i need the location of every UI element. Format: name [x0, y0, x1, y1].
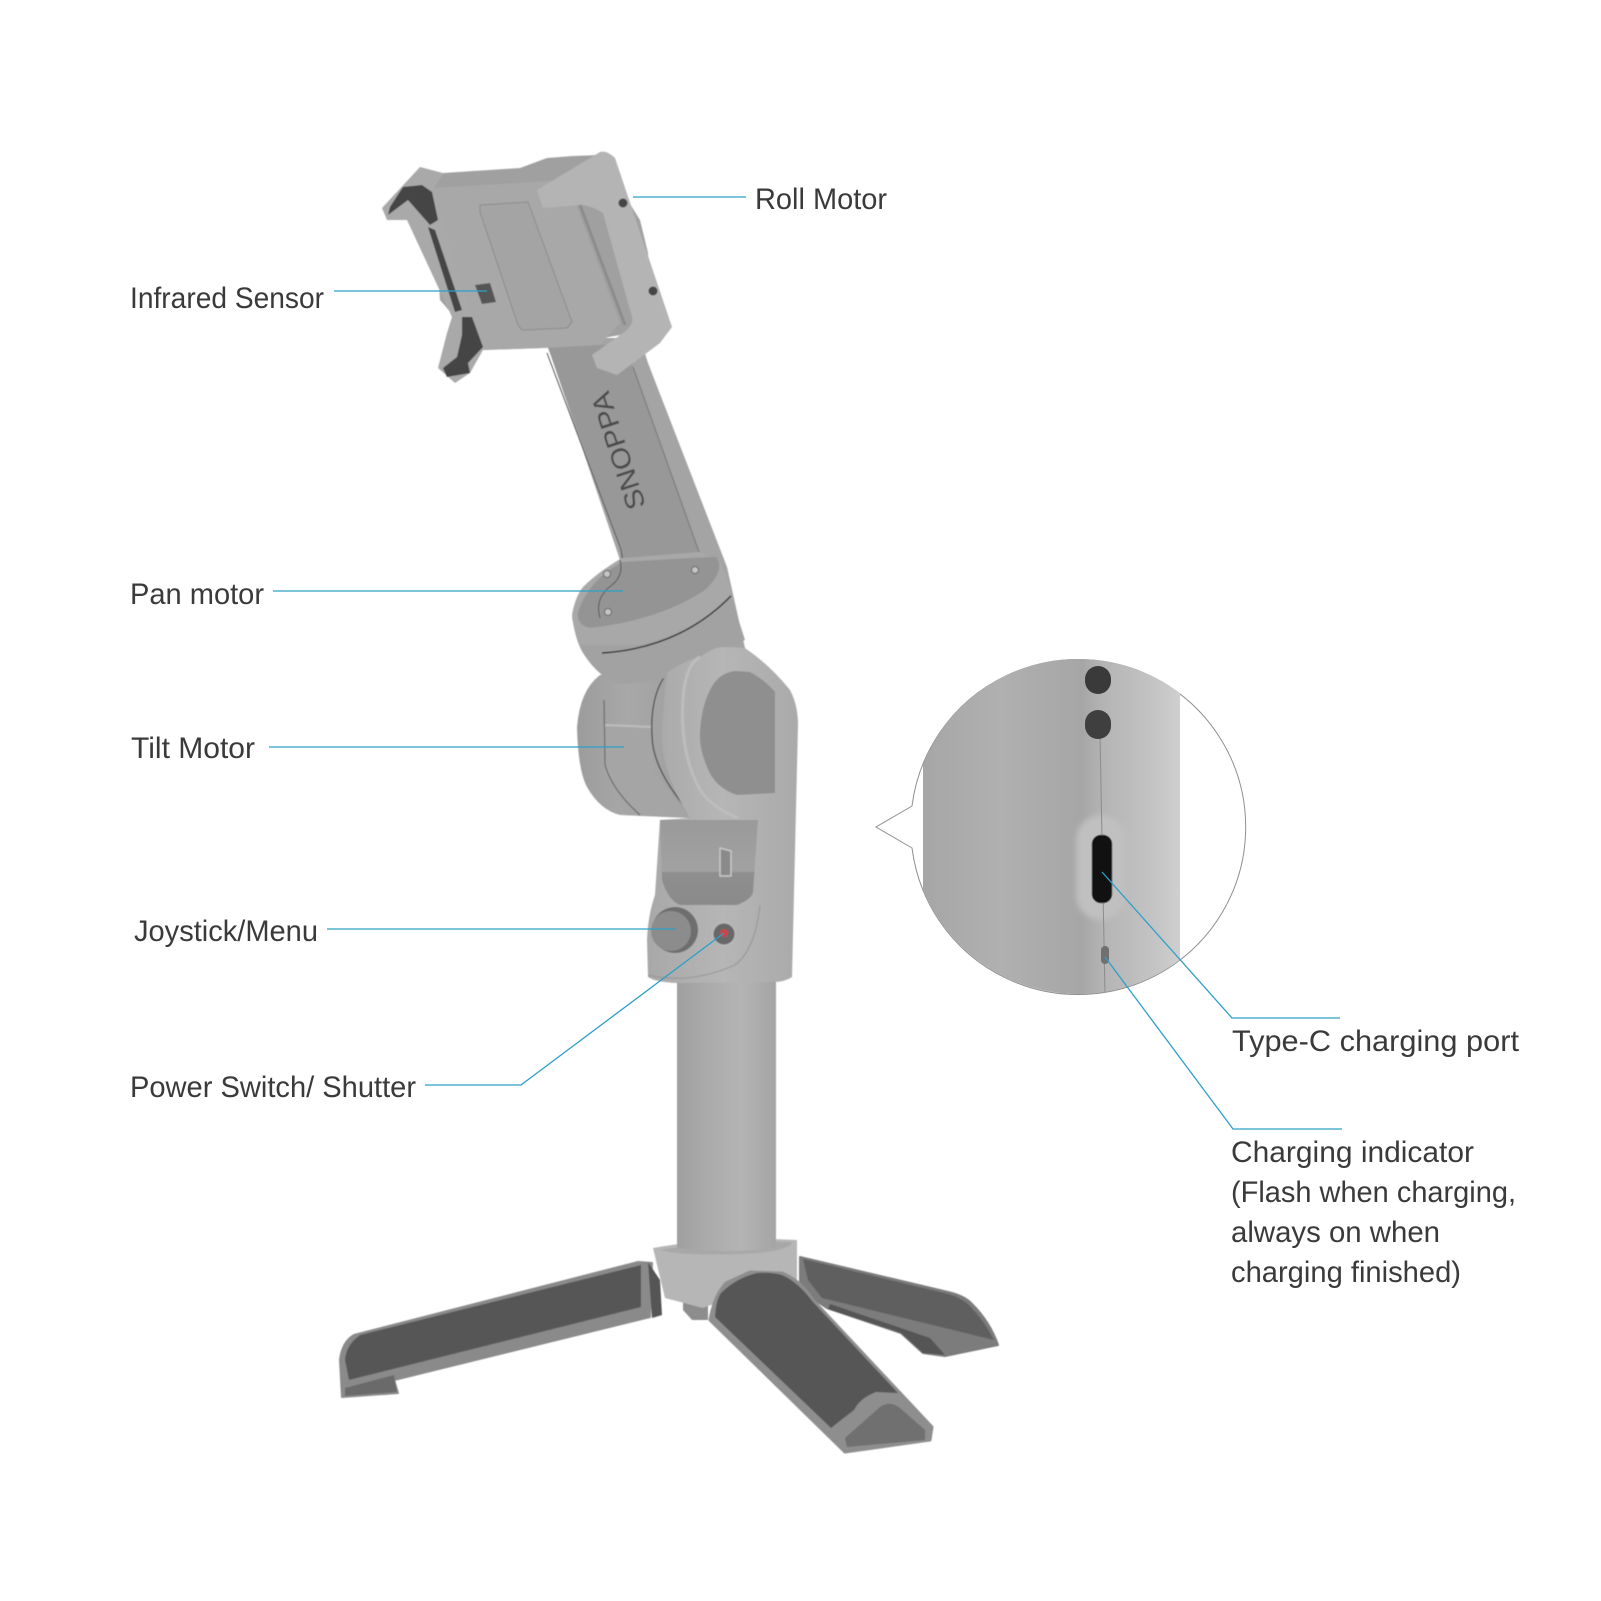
leader: joystick — [327, 928, 676, 930]
leader: roll motor — [633, 196, 746, 198]
callout outline with pointer — [876, 660, 1246, 994]
label: Charging indicator description: always on when — [1231, 1216, 1440, 1249]
infographic: gimbal parts diagram — [132, 151, 1519, 1454]
magnified handle side — [923, 650, 1180, 1000]
leader: tilt motor — [269, 746, 624, 748]
pan motor — [572, 552, 745, 684]
label: Charging indicator description: (Flash when charging, — [1231, 1176, 1516, 1209]
left tripod leg — [340, 1262, 662, 1397]
label: Infrared Sensor: Infrared Sensor — [130, 282, 324, 315]
label: Pan motor: Pan motor — [130, 578, 264, 611]
brand logo: SNOPPA — [585, 388, 652, 513]
tripod collar — [653, 1225, 797, 1308]
label: Tilt Motor: Tilt Motor — [131, 732, 255, 765]
handle body — [647, 647, 798, 983]
leader: charging indicator — [1105, 957, 1342, 1129]
Type-C port — [1092, 835, 1112, 903]
right clamp arm — [537, 152, 672, 375]
label: Charging indicator description — [1231, 1136, 1516, 1289]
label: Joystick/Menu: Joystick/Menu — [134, 915, 318, 948]
charging indicator light — [1101, 946, 1109, 964]
column — [677, 975, 776, 1255]
leader: type-C port — [1102, 872, 1340, 1018]
label: Power Switch/ Shutter: Power Switch/ Shutter — [130, 1071, 416, 1104]
arm — [545, 338, 745, 670]
callout magnified view — [876, 650, 1246, 1000]
label: Roll Motor: Roll Motor — [755, 183, 887, 216]
joystick — [651, 907, 698, 953]
right tripod leg — [800, 1257, 998, 1356]
screw holes — [1085, 666, 1111, 739]
left upper grip — [388, 185, 438, 225]
leader: infrared sensor — [334, 290, 487, 292]
left lower grip — [443, 317, 483, 377]
phone pad outline — [480, 202, 572, 330]
label: Type-C charging port: Type-C charging port — [1232, 1025, 1520, 1058]
label: Charging indicator description: Charging indicator — [1231, 1136, 1474, 1169]
power button — [712, 922, 736, 946]
phone clamp — [382, 155, 650, 383]
gimbal product illustration — [340, 152, 998, 1452]
leader: power switch — [425, 933, 724, 1085]
infrared sensor — [475, 283, 496, 304]
middle tripod leg — [710, 1272, 932, 1452]
leader: pan motor — [273, 590, 623, 592]
label: Charging indicator description: charging finished) — [1231, 1256, 1461, 1289]
tripod foot under collar — [683, 1296, 708, 1320]
tilt motor — [577, 660, 720, 818]
